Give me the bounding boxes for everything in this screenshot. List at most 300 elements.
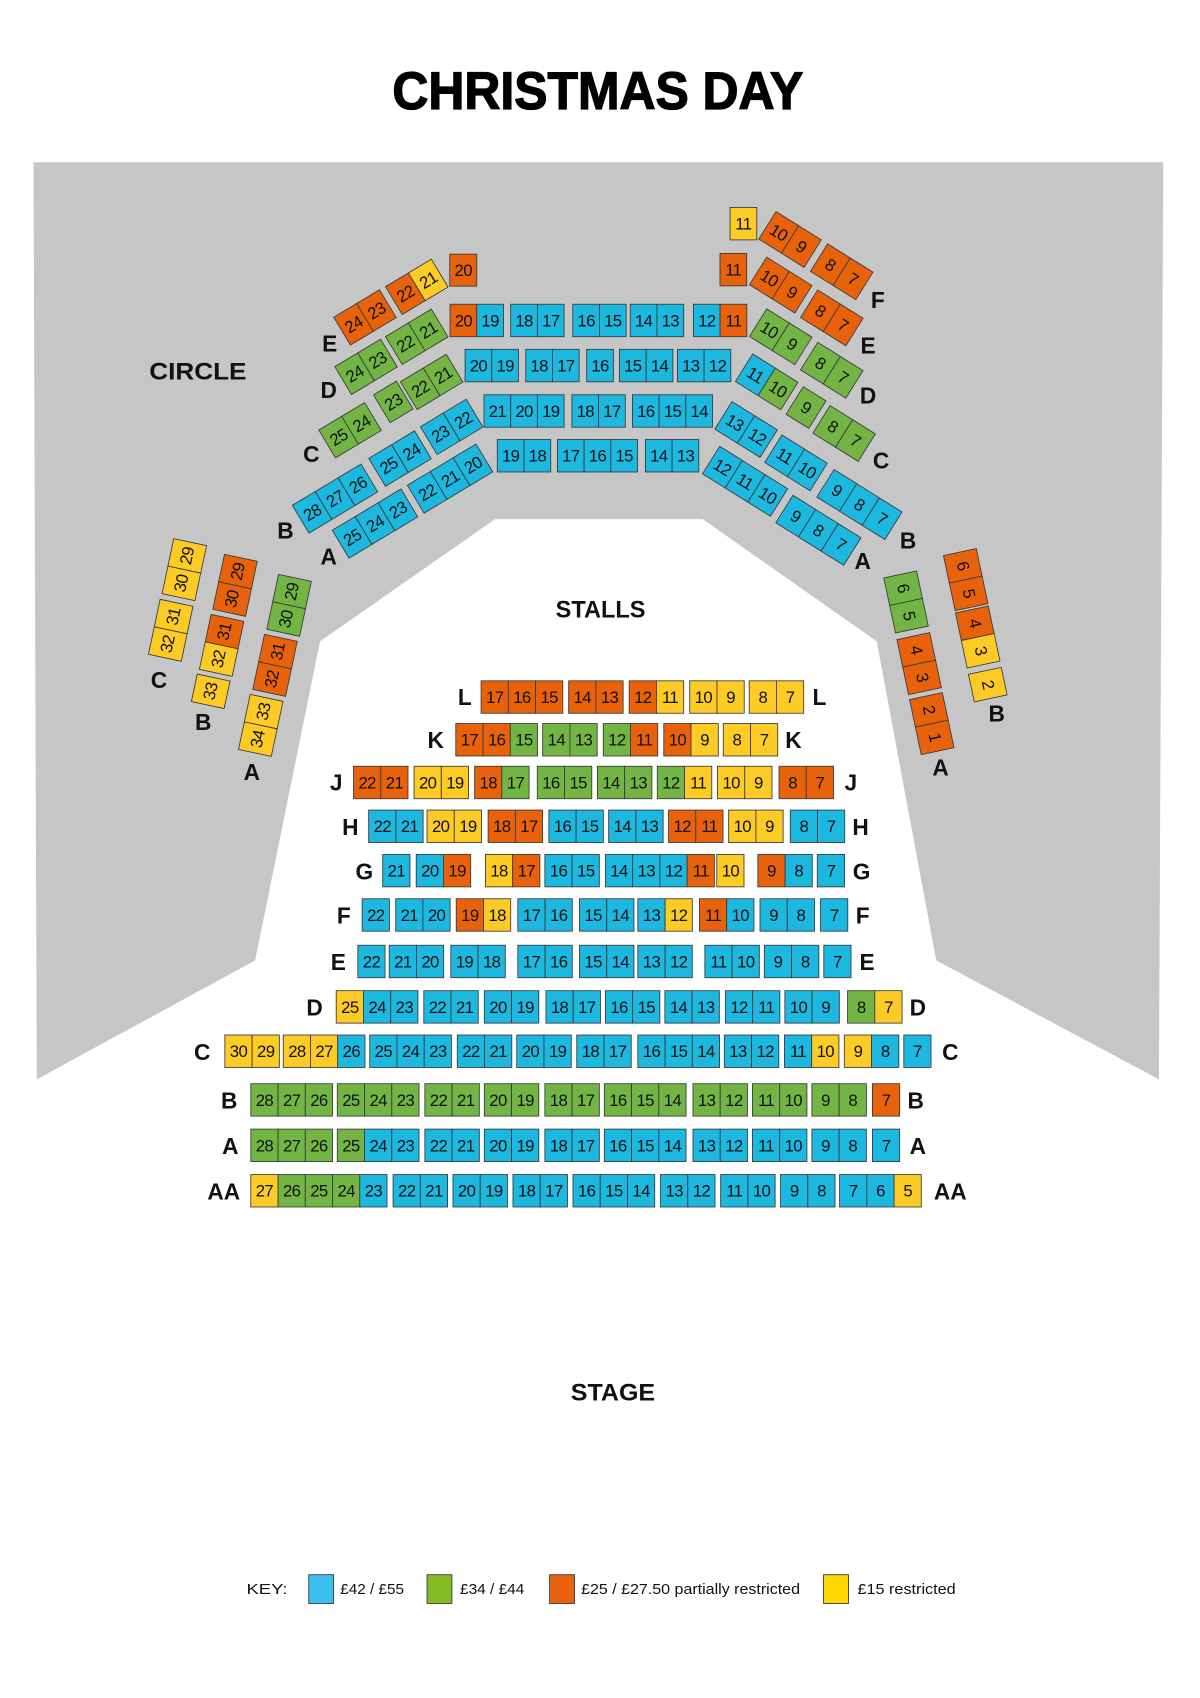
stalls row C: 14 — [697, 1042, 715, 1061]
right side boxes: 6 — [953, 560, 973, 572]
stalls row G: 9 — [767, 862, 776, 881]
stalls row J: 8 — [788, 773, 797, 792]
stalls row E: 17 — [523, 952, 540, 971]
stalls row H: H — [852, 814, 869, 840]
circle row E centre: 13 — [662, 311, 679, 330]
stalls row C: 18 — [582, 1042, 599, 1061]
circle right row labels: A — [855, 548, 871, 574]
stalls row D: 18 — [551, 998, 569, 1017]
auditorium grey background — [34, 162, 1163, 1079]
left side boxes: 32 — [157, 633, 179, 655]
stalls row L — [458, 681, 827, 713]
stalls row G: 15 — [577, 862, 595, 881]
circle right wing: 10 — [757, 266, 782, 291]
right side boxes: 1 — [925, 731, 945, 744]
stalls row L: 15 — [541, 688, 558, 707]
circle row D centre: 18 — [530, 357, 548, 376]
stalls row B: 9 — [821, 1091, 830, 1110]
stalls row A — [222, 1129, 926, 1162]
stalls row E: 14 — [612, 952, 629, 971]
circle right wing: 8 — [821, 255, 839, 276]
stalls row AA: 18 — [518, 1182, 536, 1201]
left side boxes: 32 — [261, 668, 283, 690]
stalls row G: 13 — [638, 862, 655, 881]
circle row D centre: 12 — [709, 357, 726, 376]
stalls row H: 15 — [581, 817, 599, 836]
circle left wing: 23 — [386, 497, 411, 523]
circle row C centre — [484, 395, 713, 427]
circle row E centre: 15 — [604, 311, 622, 330]
stalls row C: 22 — [462, 1042, 480, 1061]
circle row A centre: 16 — [589, 447, 606, 466]
stalls row B: 19 — [517, 1091, 534, 1110]
stalls row G: 10 — [722, 862, 739, 881]
stalls row AA: 19 — [485, 1182, 503, 1201]
stalls row F — [337, 899, 870, 931]
stalls row J: 13 — [630, 773, 647, 792]
stalls row J — [330, 766, 857, 799]
stalls row F: 14 — [612, 906, 629, 925]
stalls row G: 7 — [827, 862, 836, 881]
circle row E centre: 17 — [542, 311, 560, 330]
circle right wing: 8 — [812, 301, 829, 322]
stalls row B: 16 — [609, 1091, 627, 1110]
stalls row D: 11 — [758, 998, 775, 1017]
stalls row K: 10 — [669, 731, 686, 750]
stalls row G: 14 — [610, 862, 628, 881]
stalls row K — [427, 724, 802, 756]
circle right wing: 9 — [783, 282, 801, 303]
circle right wing: 9 — [792, 237, 810, 257]
circle left wing: 26 — [346, 472, 371, 498]
stalls row H: 7 — [827, 817, 836, 836]
stalls label: STALLS — [556, 597, 645, 624]
circle row C centre: 14 — [691, 402, 708, 421]
stalls row K: 9 — [700, 731, 709, 750]
stalls row K: 8 — [733, 731, 742, 750]
right side boxes: 5 — [959, 587, 979, 600]
stalls row A: 21 — [457, 1136, 475, 1155]
stalls row C: 27 — [315, 1042, 333, 1061]
left side boxes: 30 — [170, 573, 192, 594]
stalls row D — [306, 991, 926, 1023]
stalls row B: 20 — [489, 1091, 507, 1110]
circle right wing: 8 — [851, 495, 868, 515]
circle right row labels: C — [873, 447, 889, 473]
circle row E centre: 12 — [698, 311, 716, 330]
stalls row C — [194, 1035, 958, 1067]
stalls row A: 27 — [283, 1136, 301, 1155]
stalls row H: 12 — [673, 817, 691, 836]
circle right wing: 9 — [787, 506, 804, 527]
circle right wing: 9 — [797, 398, 815, 418]
circle left wing: 23 — [364, 298, 389, 324]
stalls row C: 12 — [757, 1042, 774, 1061]
stalls row J: 7 — [816, 773, 825, 792]
circle right wing: 11 — [733, 469, 757, 494]
circle right wing: 8 — [824, 416, 842, 437]
stalls row D: D — [306, 995, 323, 1021]
stalls row AA: 23 — [365, 1182, 382, 1201]
right side box labels: A — [932, 754, 949, 780]
stalls row C: 29 — [257, 1042, 275, 1061]
stalls row AA: 8 — [817, 1182, 826, 1201]
circle left row labels: E — [322, 330, 337, 356]
stalls row K: 14 — [548, 731, 565, 750]
stalls row F: 7 — [830, 906, 839, 925]
stalls row L: 12 — [634, 688, 652, 707]
stalls row H: 18 — [493, 817, 511, 836]
stalls row K: 15 — [515, 731, 533, 750]
circle left wing: 23 — [428, 421, 453, 447]
stalls row E — [331, 945, 875, 978]
stalls row AA: 10 — [753, 1182, 771, 1201]
stalls row B: 17 — [577, 1091, 595, 1110]
stalls row F: 11 — [705, 906, 721, 925]
left side boxes: 30 — [221, 588, 243, 610]
right side boxes: 4 — [965, 617, 985, 630]
stalls row AA: 7 — [849, 1182, 858, 1201]
stalls row G: 21 — [388, 862, 405, 881]
stalls row A: 10 — [785, 1136, 802, 1155]
circle right wing: 9 — [828, 480, 846, 501]
stalls row F: F — [856, 903, 870, 929]
right side boxes: 2 — [919, 704, 939, 716]
stalls row D: 24 — [368, 998, 386, 1017]
stalls row B: 25 — [342, 1091, 360, 1110]
stalls row J: J — [844, 770, 857, 796]
stalls row B: 21 — [457, 1091, 475, 1110]
stalls row C: 8 — [881, 1042, 890, 1061]
stalls row J: 17 — [507, 773, 524, 792]
stalls row C: 19 — [549, 1042, 567, 1061]
circle left wing: 25 — [327, 425, 351, 450]
circle row D centre: 20 — [470, 357, 487, 376]
circle row E centre: 16 — [577, 311, 595, 330]
stalls row H: 13 — [641, 817, 659, 836]
stalls row E: 19 — [456, 952, 473, 971]
stalls row F: 21 — [401, 906, 418, 925]
right side boxes: 6 — [893, 582, 913, 595]
stalls row B: 8 — [848, 1091, 857, 1110]
right side boxes: 4 — [906, 644, 927, 656]
stalls row C: 23 — [429, 1042, 447, 1061]
stalls row H — [342, 810, 869, 843]
stalls row J: 12 — [662, 773, 680, 792]
circle right wing: 12 — [710, 455, 735, 480]
stalls row B: 14 — [664, 1091, 681, 1110]
circle left wing: 23 — [365, 348, 390, 373]
left side boxes: 34 — [247, 728, 269, 750]
stalls row H: 22 — [374, 817, 391, 836]
circle right wing: 11 — [743, 363, 767, 388]
circle row C centre: 16 — [637, 402, 655, 421]
stalls row F: 12 — [670, 906, 688, 925]
circle row A centre: 18 — [529, 447, 546, 466]
stalls row G: G — [853, 858, 870, 884]
circle left wing: 24 — [343, 361, 367, 387]
circle left wing: 25 — [376, 453, 401, 478]
stalls row E: 7 — [833, 952, 842, 971]
stalls row A: 24 — [369, 1136, 387, 1155]
stalls row J: 20 — [419, 773, 437, 792]
stalls row K: 13 — [575, 731, 593, 750]
stalls row L: 14 — [574, 688, 591, 707]
stalls row B: B — [221, 1088, 237, 1114]
circle left wing: 24 — [363, 511, 388, 537]
stalls row H: 8 — [800, 817, 809, 836]
circle left wing: 22 — [415, 480, 440, 505]
stalls row D: 20 — [489, 998, 507, 1017]
stalls row A: 7 — [882, 1136, 891, 1155]
stalls row F: 13 — [643, 906, 660, 925]
circle row D centre: 16 — [591, 357, 609, 376]
stalls row F: 16 — [550, 906, 568, 925]
price key legend: £42 / £55 — [340, 1581, 404, 1598]
stalls row E: 21 — [394, 952, 412, 971]
stalls row J: J — [330, 770, 343, 796]
right side boxes: 3 — [912, 671, 932, 684]
stalls row H: 20 — [432, 817, 450, 836]
stalls row A: A — [910, 1133, 926, 1159]
left side boxes: 31 — [162, 606, 185, 627]
stalls row A: A — [222, 1133, 238, 1159]
circle left wing: 21 — [438, 466, 463, 492]
circle left wing: 28 — [300, 500, 325, 525]
stalls row E: 10 — [737, 952, 755, 971]
circle left row labels: D — [320, 377, 337, 403]
circle right wing: 8 — [812, 353, 829, 374]
stalls row C: C — [942, 1039, 958, 1065]
stalls row A: 11 — [758, 1136, 774, 1155]
circle row E centre: 14 — [635, 311, 653, 330]
price key legend: KEY: — [246, 1581, 288, 1598]
stalls row C: 26 — [343, 1042, 360, 1061]
stalls row K: K — [785, 727, 802, 753]
circle right wing: 8 — [809, 520, 827, 541]
left side boxes: 29 — [281, 581, 303, 602]
circle left wing: 22 — [451, 408, 476, 433]
circle right wing: 7 — [834, 367, 852, 388]
circle left row labels: A — [320, 544, 337, 570]
circle row A centre: 14 — [650, 447, 668, 466]
stalls row E: E — [859, 949, 875, 975]
stalls row L: 17 — [486, 688, 504, 707]
circle right row labels: B — [900, 527, 916, 553]
circle right wing: 11 — [773, 444, 797, 469]
stalls row L: 9 — [726, 688, 735, 707]
stalls row D: 10 — [790, 998, 807, 1017]
stalls row E: 8 — [801, 952, 810, 971]
stalls row J: 10 — [722, 773, 740, 792]
stalls row D: 21 — [456, 998, 474, 1017]
circle left wing: 22 — [393, 281, 418, 307]
stalls row B: 26 — [310, 1091, 328, 1110]
stalls row H: 14 — [614, 817, 631, 836]
stalls row J: 21 — [386, 773, 403, 792]
stalls row G: 16 — [550, 862, 567, 881]
stalls row E: E — [331, 949, 346, 975]
stalls row C: 13 — [729, 1042, 747, 1061]
circle right wing: 9 — [783, 334, 801, 355]
stalls row C: 24 — [402, 1042, 420, 1061]
stalls row D: 15 — [638, 998, 655, 1017]
circle left wing: 27 — [323, 486, 348, 512]
circle left wing: 24 — [341, 312, 366, 337]
stalls row D: 13 — [697, 998, 715, 1017]
stalls row B: 13 — [698, 1091, 716, 1110]
circle label: CIRCLE — [149, 359, 246, 386]
stalls row C: C — [194, 1039, 210, 1065]
circle right wing: 7 — [844, 269, 862, 290]
left side boxes: 30 — [275, 608, 297, 630]
stalls row B: 15 — [637, 1091, 654, 1110]
right side box labels — [932, 700, 1005, 780]
title: CHRISTMAS DAY — [392, 62, 803, 121]
stalls row K: 16 — [488, 731, 506, 750]
circle left wing: 21 — [431, 363, 456, 388]
stalls row A: 28 — [256, 1136, 273, 1155]
stalls row AA: 26 — [283, 1182, 301, 1201]
stalls row F: 15 — [584, 906, 602, 925]
stalls row G: 12 — [665, 862, 683, 881]
circle row D centre: 14 — [651, 357, 669, 376]
stalls row F: 17 — [523, 906, 540, 925]
circle row E centre: 19 — [481, 311, 499, 330]
stalls row K: 17 — [461, 731, 478, 750]
left side box labels: C — [151, 667, 167, 693]
stalls row D: 19 — [517, 998, 534, 1017]
circle row C centre: 20 — [515, 402, 533, 421]
circle left wing: 20 — [461, 452, 486, 478]
stalls row E: 20 — [421, 952, 439, 971]
stalls row AA: 27 — [256, 1182, 273, 1201]
stalls row A: 20 — [489, 1136, 507, 1155]
stalls row L: 7 — [786, 688, 795, 707]
stalls row G: G — [355, 858, 373, 884]
stalls row L: 10 — [695, 688, 712, 707]
right side boxes: 2 — [978, 678, 998, 691]
stalls row AA: 20 — [458, 1182, 476, 1201]
stalls row G — [355, 854, 870, 887]
right side boxes: 3 — [971, 645, 991, 657]
stalls row G: 20 — [421, 862, 439, 881]
stalls row D: 23 — [396, 998, 413, 1017]
stalls row K: K — [427, 727, 444, 753]
stalls row D: 9 — [821, 998, 830, 1017]
circle left row labels: C — [303, 441, 320, 467]
circle row C centre: 21 — [489, 402, 506, 421]
stalls row E: 22 — [363, 952, 380, 971]
stalls row A: 12 — [725, 1136, 743, 1155]
stalls row D: 12 — [730, 998, 748, 1017]
price key legend: £25 / £27.50 partially restricted — [581, 1581, 800, 1598]
stalls row G: 19 — [448, 862, 466, 881]
circle row A centre: 17 — [562, 447, 580, 466]
stalls row J: 22 — [358, 773, 376, 792]
stalls row F: F — [337, 903, 351, 929]
circle right wing: 10 — [757, 317, 782, 343]
stalls row J: 16 — [542, 773, 560, 792]
stalls row AA: 24 — [337, 1182, 355, 1201]
stalls row E: 18 — [483, 952, 501, 971]
circle row E centre — [450, 304, 747, 337]
stalls row D: 16 — [610, 998, 628, 1017]
stalls row C: 10 — [817, 1042, 834, 1061]
stalls row D: 7 — [884, 998, 893, 1017]
stalls row J: 9 — [754, 773, 763, 792]
circle left wing — [292, 259, 493, 558]
stalls row E: 15 — [584, 952, 602, 971]
circle row D centre: 19 — [496, 357, 514, 376]
circle right wing: 10 — [755, 483, 780, 509]
left side box labels: A — [244, 759, 260, 785]
stalls row L: 13 — [601, 688, 619, 707]
circle right wing: 7 — [846, 431, 864, 451]
left side box labels: B — [195, 709, 211, 735]
stalls row C: 17 — [609, 1042, 627, 1061]
circle right wing: 12 — [745, 424, 770, 450]
stalls row L: L — [458, 684, 472, 710]
stalls row A: 16 — [609, 1136, 627, 1155]
stalls row E: 13 — [643, 952, 660, 971]
left side boxes: 29 — [227, 561, 249, 582]
circle single seats — [450, 207, 757, 286]
left side boxes: 29 — [176, 545, 198, 566]
stalls row A: 17 — [577, 1136, 595, 1155]
stalls row AA: 21 — [425, 1182, 443, 1201]
circle row A centre: 15 — [615, 447, 633, 466]
stalls row D: 17 — [578, 998, 596, 1017]
price key legend: £15 restricted — [858, 1581, 956, 1598]
stalls row C: 25 — [375, 1042, 392, 1061]
circle left wing: 22 — [393, 331, 418, 357]
circle row D centre: 17 — [557, 357, 575, 376]
stalls row B: 10 — [785, 1091, 802, 1110]
stalls row B: 28 — [256, 1091, 273, 1110]
stalls row C: 15 — [670, 1042, 688, 1061]
stalls row D: 22 — [429, 998, 446, 1017]
stalls row J: 14 — [602, 773, 620, 792]
circle left wing: 21 — [416, 268, 441, 293]
stalls row B: 12 — [725, 1091, 743, 1110]
circle row D centre — [465, 349, 731, 382]
stalls row AA: 15 — [605, 1182, 623, 1201]
stalls row H: 16 — [554, 817, 571, 836]
right side box labels: B — [989, 700, 1005, 726]
stalls row G: 17 — [518, 862, 535, 881]
left side box labels — [151, 667, 260, 785]
stalls row H: 17 — [520, 817, 538, 836]
left side boxes: 33 — [252, 701, 275, 722]
stalls row J: 11 — [690, 773, 707, 792]
circle single seats: 11 — [735, 215, 752, 234]
stalls row K: 12 — [608, 731, 626, 750]
circle right wing: 10 — [795, 458, 820, 483]
stalls row E: 12 — [670, 952, 688, 971]
circle right wing: 7 — [832, 534, 850, 555]
stalls row D: 14 — [670, 998, 687, 1017]
stalls row C: 11 — [790, 1042, 806, 1061]
circle left wing: 22 — [408, 376, 433, 402]
stalls row E: 16 — [550, 952, 568, 971]
left side boxes — [148, 539, 311, 756]
stalls row H: 19 — [459, 817, 477, 836]
stalls row H: 11 — [701, 817, 718, 836]
circle right wing — [703, 212, 902, 565]
circle row E centre: 20 — [455, 311, 472, 330]
stalls row B: 7 — [882, 1091, 891, 1110]
